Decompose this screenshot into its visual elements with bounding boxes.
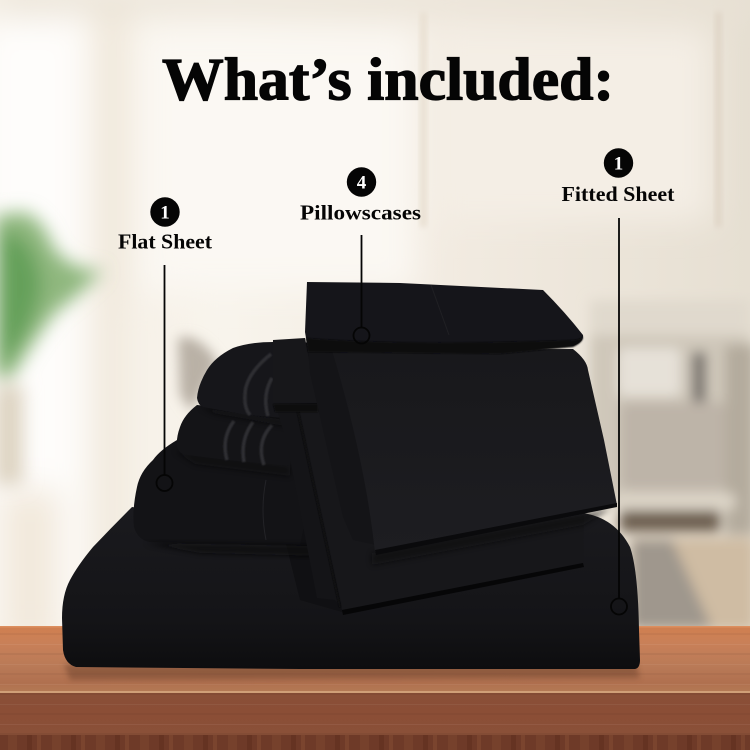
background sofa [590, 300, 750, 630]
upper folded pillowcase [197, 342, 290, 418]
badge: 1: 1 [160, 202, 170, 224]
fourth layer [275, 403, 340, 607]
label: pillowcases: Pillowscases [300, 200, 421, 224]
label: flat sheet: Flat Sheet [118, 230, 212, 254]
badge: 4 [347, 167, 376, 197]
shadow under the flap [372, 509, 610, 565]
flat sheet [133, 440, 320, 556]
second layer [308, 350, 376, 545]
dark base behind the hanging layers [270, 340, 380, 612]
callout: fitted sheet [562, 148, 674, 615]
lower folded pillowcase [177, 405, 295, 466]
label: fitted sheet: Fitted Sheet [562, 182, 674, 206]
leader line: pillowcases [354, 235, 370, 344]
seam between layers [297, 407, 340, 607]
third layer with lower fold [297, 405, 584, 610]
badge: 1 [604, 148, 633, 178]
badge: 1 [150, 197, 180, 227]
callout: pillowcases [300, 167, 421, 344]
hanging pillowcase layers [273, 338, 610, 615]
fitted sheet [62, 507, 640, 669]
pillow spine [273, 338, 317, 404]
wooden table [0, 626, 750, 750]
title: What’s included: [162, 46, 614, 112]
callout: flat sheet [118, 197, 212, 491]
main flap [332, 349, 617, 552]
leader line: flat sheet [156, 265, 172, 491]
background plant [0, 212, 104, 485]
badge: 4: 4 [357, 172, 367, 194]
top pillowcase [305, 282, 583, 354]
front pillowcase flap [308, 349, 617, 555]
leader line: fitted sheet [611, 218, 627, 614]
stack of black bedding [62, 282, 640, 669]
badge: 1: 1 [614, 154, 623, 174]
